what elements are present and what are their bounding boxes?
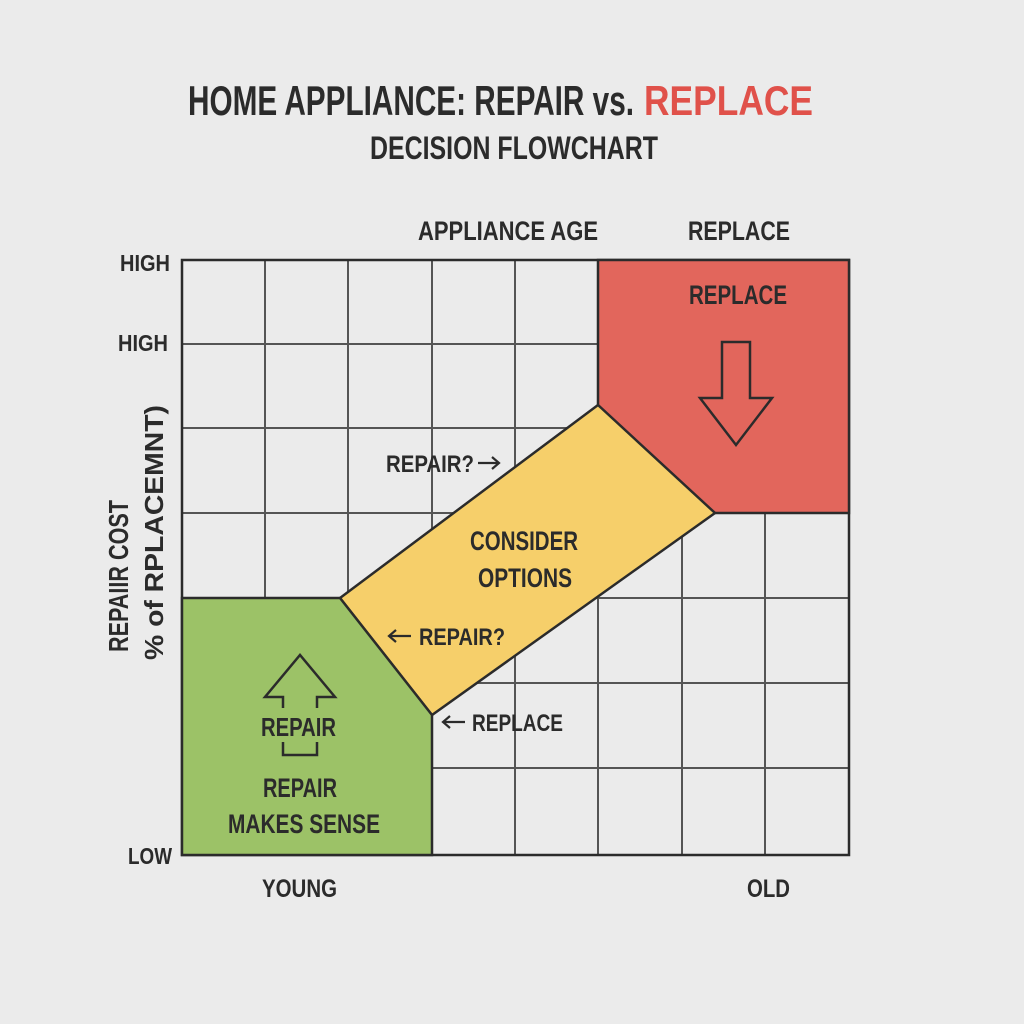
region: replace (red): REPLACE [689, 280, 787, 310]
region: consider options (yellow): CONSIDER [470, 526, 578, 556]
title: HOME APPLIANCE: REPAIR vs. [188, 77, 634, 124]
y axis label: REPAIIR COST [103, 500, 134, 652]
callout: replace arrow left: REPLACE [472, 710, 563, 737]
y axis label [103, 405, 169, 660]
region: repair makes sense (green): REPAIR [261, 712, 336, 742]
callout: replace arrow left [443, 710, 563, 737]
x axis ticks: YOUNG [262, 875, 337, 903]
title: REPLACE [644, 77, 813, 124]
region: consider options (yellow) [340, 405, 715, 715]
x axis ticks: OLD [747, 875, 790, 903]
region: repair makes sense (green): MAKES SENSE [228, 809, 380, 839]
header: replace: REPLACE [688, 216, 790, 246]
icon: down arrow [700, 342, 772, 445]
y axis ticks: LOW [128, 843, 172, 869]
y axis label: % of RPLACEMNT) [139, 405, 169, 660]
region: repair makes sense (green): REPAIR [263, 773, 337, 803]
region: consider options (yellow): OPTIONS [478, 563, 572, 593]
icon: up arrow [265, 655, 335, 755]
x axis ticks [262, 875, 790, 903]
y axis ticks: HIGH [120, 250, 170, 276]
region: replace (red) [598, 260, 849, 513]
region: repair makes sense (green) [182, 598, 432, 855]
y axis ticks [118, 250, 172, 869]
subtitle: DECISION FLOWCHART [370, 130, 658, 166]
callout: repair? arrow right: REPAIR? [386, 451, 474, 478]
y axis ticks: HIGH [118, 330, 168, 356]
callout: repair? arrow left [389, 624, 505, 651]
callout: repair? arrow left: REPAIR? [419, 624, 505, 651]
grid [182, 260, 849, 855]
axis header: appliance age: APPLIANCE AGE [418, 216, 598, 246]
